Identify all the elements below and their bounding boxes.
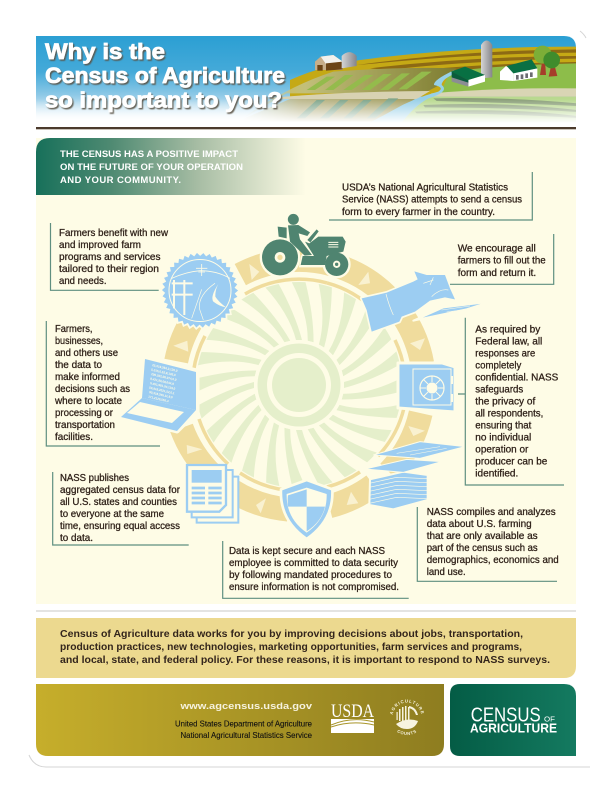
callout: farmers benefit: Farmers benefit with new: [59, 228, 168, 239]
footer: census of agriculture logo: [450, 684, 576, 756]
title: [45, 39, 285, 112]
callout: farmers benefit: tailored to their region: [59, 264, 159, 275]
callout: NASS compiles: part of the census such as: [427, 543, 538, 554]
footer: census of agriculture logo: CENSUS: [471, 704, 541, 726]
banner: positive impact: AND YOUR COMMUNITY.: [60, 175, 181, 186]
callout: NASS publishes: all U.S. states and counties: [60, 497, 177, 508]
callout: confidentiality: no individual: [475, 432, 531, 444]
icon: safe: [398, 363, 455, 412]
callout: NASS compiles: [417, 507, 559, 581]
callout: confidentiality: safeguards: [475, 384, 523, 396]
scene in zoomed coordinates: [237, 40, 577, 125]
icon: laptop with data: [121, 358, 197, 431]
logo: agriculture counts seal: COUNTS: [398, 730, 416, 736]
callout: informed decisions: transportation: [55, 420, 115, 431]
icon: tractor: [262, 214, 348, 276]
title: so important to you?: [45, 88, 282, 112]
icon: laptop with data: 50,918,2021,52,0,1: [149, 386, 175, 395]
panel: summary statement: production practices, new technologies, marketing opportunities, farm services and programs,: [60, 642, 522, 653]
callout: confidentiality: operation or: [475, 444, 529, 456]
icon: paper stack: [365, 442, 465, 509]
icon: laptop with data: 90,316,345,11,9,0: [149, 390, 173, 399]
callout: informed decisions: [46, 321, 160, 446]
footer: gold contact panel: [36, 684, 444, 756]
callout: confidentiality: the privacy of: [475, 396, 535, 408]
callout: NASS publishes: [53, 472, 189, 545]
callout: informed decisions: businesses,: [55, 336, 103, 347]
callout: confidentiality: confidential. NASS: [475, 372, 558, 384]
callout: USDA census form: form to every farmer in the country.: [342, 207, 495, 218]
callout: informed decisions: make informed: [55, 372, 120, 383]
sunburst center: [198, 282, 400, 486]
icon: laptop with data: 9,421,90,09,644,9: [150, 377, 175, 386]
callout: NASS publishes: time, ensuring equal access: [60, 521, 180, 532]
panel: summary statement: Census of Agriculture data works for you by improving decisions about jobs, transportation,: [60, 629, 523, 640]
callout: informed decisions: decisions such as: [55, 384, 130, 395]
trees: [534, 46, 560, 77]
banner: positive impact: [36, 138, 306, 195]
callout: NASS publishes: to data.: [60, 533, 93, 544]
callout: USDA census form: [329, 172, 532, 220]
icon: laptop with data: 5,451,981,04,119,0: [150, 381, 176, 391]
header illustration: farm scene: [36, 36, 577, 126]
title: Census of Agriculture: [45, 63, 285, 88]
callout: encourage farmers: form and return it.: [458, 268, 536, 279]
callout: NASS publishes: aggregated census data for: [60, 485, 181, 496]
tall silo: [481, 40, 492, 78]
callout: NASS compiles: data about U.S. farming: [427, 519, 532, 530]
icon: hand filling out form: [362, 271, 491, 332]
footer: census of agriculture logo: AGRICULTURE: [470, 720, 557, 736]
callout: informed decisions: where to locate: [54, 396, 122, 407]
panel: cream background: [36, 138, 576, 604]
title: Why is the: [45, 39, 165, 64]
icon: laptop with data: 171,2120,555,4: [148, 395, 169, 403]
ring: tan process cycle: [173, 260, 425, 513]
logo: USDA: USDA: [331, 701, 374, 722]
callout: confidentiality: producer can be: [475, 456, 548, 468]
callout: confidentiality: identified.: [475, 468, 518, 480]
footer: census of agriculture logo: OF: [544, 716, 555, 724]
callout: informed decisions: facilities.: [55, 432, 93, 443]
panel: summary statement: and local, state, and federal policy. For these reasons, it is important to respond to NASS surveys.: [60, 655, 550, 666]
header divider: [36, 127, 576, 130]
callout: NASS compiles: NASS compiles and analyzes: [427, 507, 556, 518]
banner: positive impact: ON THE FUTURE OF YOUR OPERATION: [60, 162, 243, 173]
footer: gold contact panel: National Agricultural Statistics Service: [180, 731, 313, 740]
green roof barn: [451, 67, 485, 87]
white barn: [500, 59, 537, 81]
callout: farmers benefit: and improved farm: [59, 240, 141, 251]
footer: gold contact panel: United States Department of Agriculture: [175, 720, 313, 728]
callout: NASS publishes: to everyone at the same: [60, 509, 164, 520]
form sheet: [413, 302, 491, 321]
icon: laptop with data: 5,015,0,52,9,135,0: [151, 368, 176, 377]
logo: agriculture counts seal: AGRICULTURE: [390, 700, 424, 715]
callout: USDA census form: USDA’s National Agricultural Statistics: [342, 182, 508, 194]
icon: laptop with data: 25,019,394,3,120,0: [152, 363, 178, 373]
callout: confidentiality: responses are: [475, 348, 535, 360]
callout: farmers benefit: programs and services: [59, 252, 160, 263]
callout: NASS compiles: that are only available as: [427, 531, 538, 542]
logo: USDA: [331, 701, 374, 733]
callout: data security: employee is committed to data security: [229, 558, 399, 569]
callout: NASS compiles: land use.: [427, 567, 466, 578]
callout: informed decisions: the data to: [55, 360, 102, 371]
callout: data security: ensure information is not compromised.: [229, 582, 399, 593]
callout: data security: by following mandated procedures to: [229, 570, 392, 581]
footer: gold contact panel: www.agcensus.usda.gov: [179, 701, 313, 712]
callout: confidentiality: all respondents,: [475, 408, 543, 420]
callout: confidentiality: ensuring that: [475, 420, 531, 432]
logo: agriculture counts seal: [390, 700, 424, 736]
icon: laptop with data: 290,022,06,074,0,0: [151, 372, 177, 382]
ring arrows: [173, 264, 425, 513]
callout: confidentiality: completely: [475, 360, 522, 372]
callout: confidentiality: As required by: [475, 324, 541, 336]
callout: encourage farmers: We encourage all: [458, 244, 536, 255]
icon: shield: [281, 480, 332, 539]
icon: seal with roads and power lines: [161, 252, 239, 329]
icon: document stack: [187, 465, 238, 523]
callout: farmers benefit: and needs.: [59, 276, 106, 287]
callout: informed decisions: and others use: [55, 348, 118, 359]
callout: NASS publishes: NASS publishes: [60, 473, 129, 484]
callout: informed decisions: processing or: [55, 408, 114, 419]
callout: confidentiality: Federal law, all: [475, 336, 542, 348]
callout: data security: [223, 541, 409, 598]
banner: positive impact: THE CENSUS HAS A POSITIVE IMPACT: [60, 149, 238, 160]
small barn: [315, 55, 343, 71]
callout: encourage farmers: farmers to fill out the: [458, 256, 546, 267]
callout: encourage farmers: [450, 234, 554, 284]
callout: farmers benefit: [50, 223, 168, 290]
callout: informed decisions: Farmers,: [55, 324, 92, 335]
callout: USDA census form: Service (NASS) attempts to send a census: [342, 195, 522, 206]
callout: NASS compiles: demographics, economics and: [427, 555, 559, 566]
callout: data security: Data is kept secure and each NASS: [229, 546, 385, 557]
callout: confidentiality: [458, 318, 564, 485]
panel: summary statement: [36, 618, 576, 678]
